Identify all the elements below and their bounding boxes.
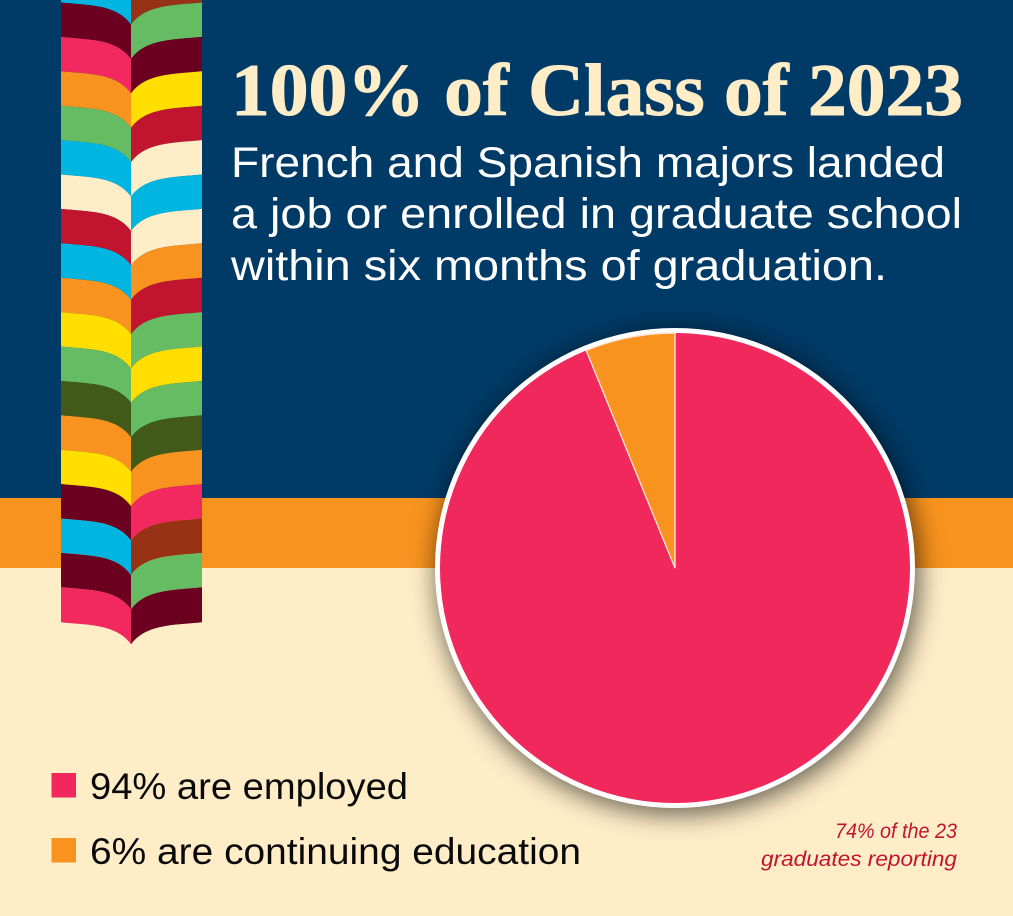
legend [52,766,581,872]
legend label: employed: 94% are employed [90,766,408,807]
background: navy panel [0,0,1013,498]
footnote: 74% of the 23 [835,820,957,843]
legend swatch: employed [52,773,76,798]
subtitle text block: a job or enrolled in graduate school [231,190,962,238]
subtitle text block: within six months of graduation. [230,242,887,290]
ribbon: colourful chevron banner [61,0,202,644]
background: orange band [0,498,1013,568]
pie chart [435,328,919,814]
title: 100% of Class of 2023 [231,50,963,132]
subtitle text block [230,139,962,290]
legend label: continuing education: 6% are continuing education [90,831,581,872]
pie slice: 94% employed [440,333,910,803]
legend swatch: continuing education [52,838,76,862]
footnote: graduates reporting [761,848,957,871]
pie shadow [437,332,919,814]
subtitle text block: French and Spanish majors landed [231,139,945,187]
pie slice: 6% continuing education [586,333,675,568]
background: cream panel [0,568,1013,916]
footnote [761,820,957,871]
pie outer white ring [435,328,915,808]
